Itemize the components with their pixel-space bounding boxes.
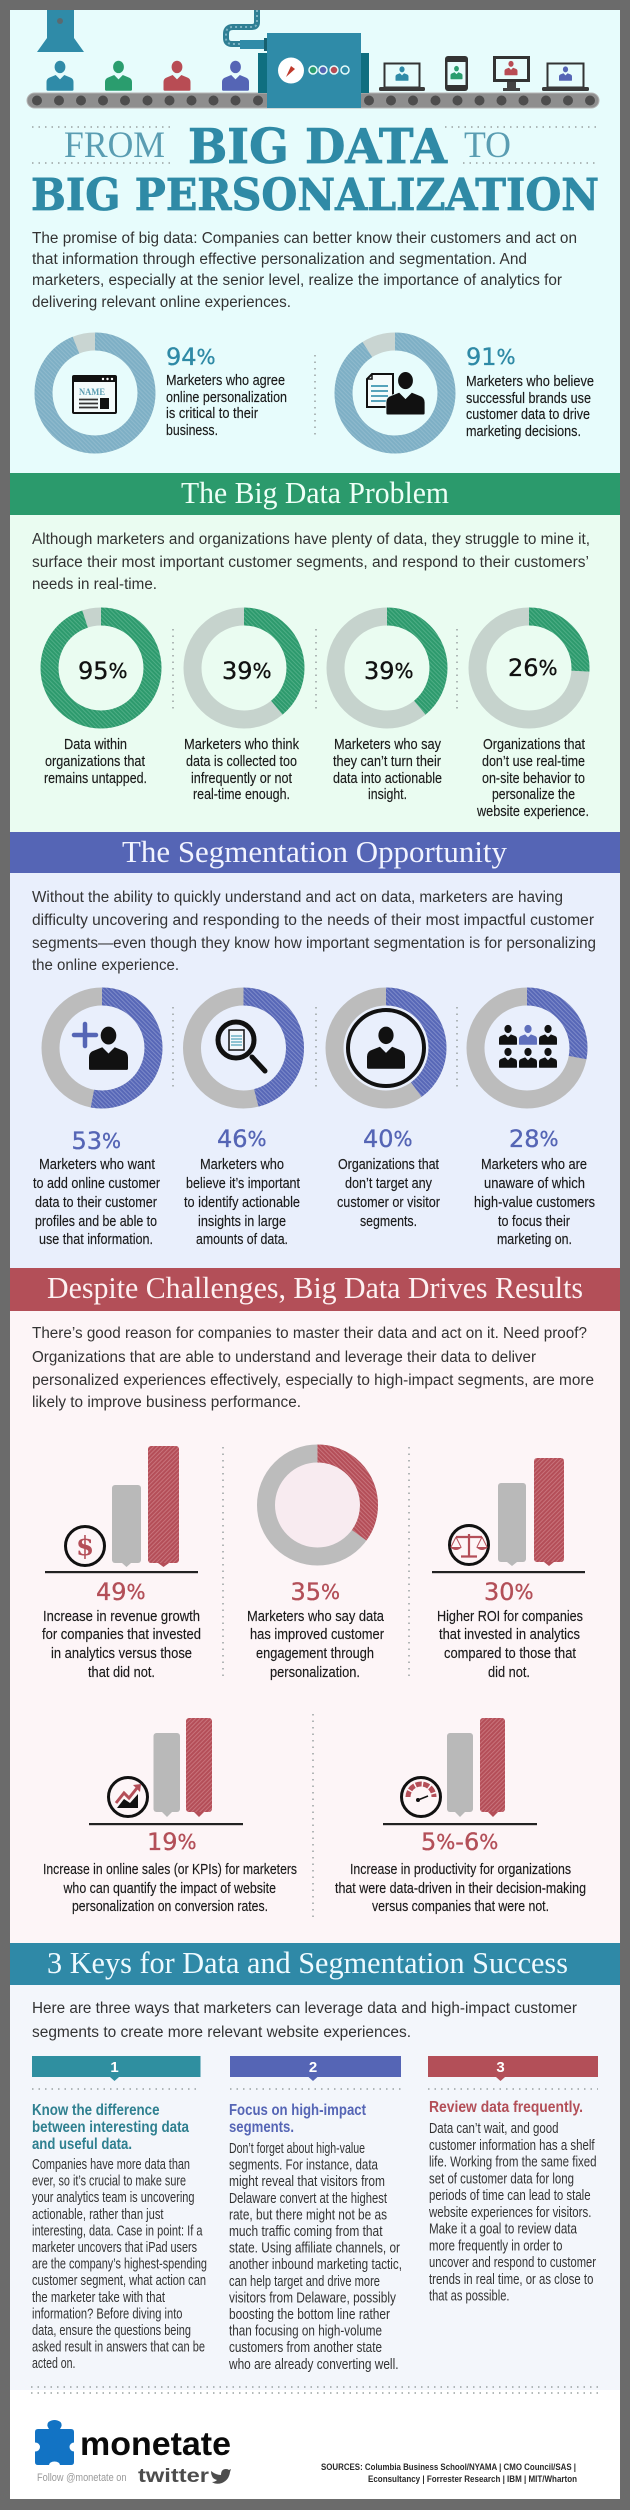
key 1 xyxy=(32,2056,207,2372)
captions: segmentation stats: high-value customers xyxy=(474,1194,595,1211)
donut: 39%: 39 xyxy=(222,657,253,685)
icon: name window: NAME xyxy=(79,387,105,397)
text: results intro: personalized experiences effectively, especially to high-impact segments, are more xyxy=(32,1372,594,1389)
stats: results percentages top row: 49 xyxy=(96,1578,127,1606)
captions: segmentation stats: to add online customer xyxy=(33,1175,160,1192)
icon: trend arrow xyxy=(108,1778,148,1816)
text: keys intro: Here are three ways that marketers can leverage data and high-impact customer xyxy=(32,2000,577,2017)
stats: results percentages bottom row xyxy=(147,1828,498,1856)
captions: results bottom row: personalization on conversion rates. xyxy=(72,1898,268,1915)
sources: Econsultancy | Forrester Research | IBM | MIT/Wharton xyxy=(368,2474,577,2485)
donut: 28% xyxy=(476,996,578,1100)
captions: results bottom row: who can quantify the impact of website xyxy=(63,1880,276,1897)
text: results intro xyxy=(32,1325,594,1411)
stat: 94%: business. xyxy=(166,422,218,439)
captions: segmentation stats: Marketers who are xyxy=(481,1156,587,1173)
icon: audience group xyxy=(499,1025,557,1068)
intro text: that information through effective personalization and segmentation. And xyxy=(32,251,527,268)
sources xyxy=(321,2462,577,2485)
title: BIG DATA xyxy=(188,119,448,175)
body: key 3: Data can’t wait, and good xyxy=(429,2121,558,2137)
body: key 1: the marketer take with that xyxy=(32,2290,165,2306)
captions: segmentation stats: don’t target any xyxy=(345,1175,432,1192)
icon: phone green xyxy=(445,56,468,91)
icon: laptop blue xyxy=(542,64,589,91)
intro text xyxy=(32,230,577,311)
panel: the big data problem xyxy=(10,473,620,832)
text: problem intro: needs in real-time. xyxy=(32,576,157,593)
body: key 1: acted on. xyxy=(32,2356,76,2372)
text: keys intro: segments to create more relevant website experiences. xyxy=(32,2024,411,2041)
body: key 3 xyxy=(428,2121,597,2304)
heading: key 2: Focus on high-impact xyxy=(229,2102,367,2119)
stat: 91%: customer data to drive xyxy=(466,406,590,423)
heading: key 1: between interesting data xyxy=(32,2119,189,2136)
text: segmentation intro: difficulty uncovering and responding to the needs of their most impactful customer xyxy=(32,912,594,929)
captions: problem stats: website experience. xyxy=(476,803,589,820)
icon: dollar: $ xyxy=(76,1532,94,1562)
captions: problem stats: data into actionable xyxy=(333,770,442,787)
heading: key 1: and useful data. xyxy=(32,2136,132,2153)
illustration: conveyor machine xyxy=(27,10,599,108)
captions: results top row: in analytics versus those xyxy=(51,1645,192,1662)
body: key 2: than focusing on high-volume xyxy=(229,2324,382,2340)
donut: 26%: 26 xyxy=(508,654,539,682)
captions: problem stats: remains untapped. xyxy=(44,770,147,787)
conveyor belt xyxy=(27,93,599,108)
stats: results percentages top row: 35 xyxy=(290,1578,321,1606)
stat: 94%: % xyxy=(197,345,216,369)
captions: results top row: compared to those that xyxy=(444,1645,577,1662)
bar chart: 5%-6% productivity xyxy=(383,1718,537,1825)
captions: results top row: that did not. xyxy=(88,1664,155,1681)
donut: 39% xyxy=(192,616,296,720)
heading: key 1 xyxy=(32,2102,189,2153)
captions: results top row: that invested in analytics xyxy=(439,1626,580,1643)
banner: number 1 xyxy=(32,2056,200,2081)
sources: SOURCES: Columbia Business School/NYAMA | CMO Council/SAS | xyxy=(321,2462,576,2473)
follow on twitter: Follow @monetate on xyxy=(37,2472,126,2484)
text: segmentation intro: segments—even though they know how important segmentation is for personalizing xyxy=(32,935,596,952)
captions: problem stats: real-time enough. xyxy=(193,786,290,803)
stats: segmentation percentages: 40 xyxy=(363,1125,394,1153)
donut: 35% xyxy=(266,1454,369,1556)
stats: segmentation percentages: % xyxy=(102,1129,121,1153)
banner: number 1: 1 xyxy=(110,2059,119,2076)
text: results intro: Organizations that are able to understand and leverage their data to deliver xyxy=(32,1349,536,1366)
captions: results bottom row: Increase in online sales (or KPIs) for marketers xyxy=(43,1861,297,1878)
text: segmentation intro: the online experience. xyxy=(32,957,179,974)
stat: 94%: Marketers who agree xyxy=(166,372,285,389)
machine xyxy=(226,10,369,108)
heading: the segmentation opportunity: The Segmentation Opportunity xyxy=(122,834,507,869)
captions: results top row: personalization. xyxy=(270,1664,360,1681)
body: key 2: boosting the bottom line rather xyxy=(229,2307,390,2323)
captions: problem stats xyxy=(44,736,589,820)
captions: results bottom row xyxy=(43,1861,586,1915)
stats: results percentages bottom row: % xyxy=(178,1830,197,1854)
icon: laptop teal xyxy=(379,64,425,91)
stats: results percentages bottom row: 5 xyxy=(421,1828,436,1856)
banner: number 3 xyxy=(428,2056,598,2081)
intro text: delivering relevant online experiences. xyxy=(32,294,291,311)
captions: problem stats: don’t use real-time xyxy=(482,753,585,770)
body: key 1: ever, so it’s crucial to make sure xyxy=(32,2174,186,2190)
donut: 53% xyxy=(50,996,154,1100)
captions: results bottom row: Increase in productivity for organizations xyxy=(350,1861,571,1878)
icon: puzzle piece xyxy=(31,2420,78,2468)
captions: results top row: for companies that invested xyxy=(42,1626,201,1643)
stat: 91%: successful brands use xyxy=(466,390,591,407)
text: results intro: likely to improve business performance. xyxy=(32,1394,301,1411)
icon: balance scale xyxy=(450,1526,488,1564)
captions: segmentation stats: profiles and be able to xyxy=(35,1213,157,1230)
captions: results bottom row: that were data-driven in their decision-making xyxy=(335,1880,586,1897)
captions: segmentation stats: unaware of which xyxy=(484,1175,585,1192)
captions: segmentation stats: Marketers who want xyxy=(39,1156,156,1173)
captions: results top row: has improved customer xyxy=(250,1626,384,1643)
body: key 2: segments. For instance, data xyxy=(229,2158,379,2174)
stats: segmentation percentages: % xyxy=(394,1127,413,1151)
captions: segmentation stats: Organizations that xyxy=(338,1156,440,1173)
text: keys intro xyxy=(32,2000,577,2041)
body: key 1: Companies have more data than xyxy=(32,2157,190,2173)
banner: number 3: 3 xyxy=(496,2059,505,2076)
captions: problem stats: Marketers who say xyxy=(334,736,441,753)
stat: 91%: Marketers who believe xyxy=(466,373,594,390)
key 3 xyxy=(428,2056,598,2304)
icon: data funnel xyxy=(37,10,84,52)
stat: 91%: marketing decisions. xyxy=(466,423,581,440)
stats: segmentation percentages: 53 xyxy=(72,1127,102,1155)
captions: results top row: Marketers who say data xyxy=(247,1608,385,1625)
icon: magnifier on document xyxy=(218,1022,265,1071)
captions: problem stats: data is collected too xyxy=(186,753,297,770)
stats: segmentation percentages: % xyxy=(540,1127,559,1151)
donut: 95%: % xyxy=(109,659,128,683)
captions: problem stats: they can’t turn their xyxy=(333,753,441,770)
body: key 3: Make it a goal to review data xyxy=(429,2222,578,2238)
panel: big data drives results xyxy=(10,1268,620,1943)
body: key 2: might reveal that visitors from xyxy=(229,2174,385,2190)
heading: key 2: segments. xyxy=(229,2119,294,2136)
panel: footer xyxy=(10,2387,620,2499)
stats: results percentages bottom row: % xyxy=(479,1830,498,1854)
donut: 26%: % xyxy=(539,656,558,680)
captions: results top row: did not. xyxy=(488,1664,530,1681)
captions: results top row: engagement through xyxy=(256,1645,374,1662)
stats: results percentages top row xyxy=(96,1578,534,1606)
body: key 2: rate, but there might not be as xyxy=(229,2207,387,2223)
donut: 40% xyxy=(334,996,438,1100)
body: key 1: marketer uncovers that iPad users xyxy=(32,2240,197,2256)
captions: problem stats: infrequently or not xyxy=(191,770,293,787)
body: key 1: your analytics team is uncovering xyxy=(32,2190,194,2206)
captions: problem stats: Organizations that xyxy=(483,736,586,753)
captions: segmentation stats: amounts of data. xyxy=(196,1231,288,1248)
follow on twitter: twitter xyxy=(138,2466,210,2487)
donut: 26% xyxy=(478,616,580,720)
donut: 39% second: % xyxy=(395,659,414,683)
stat: 94%: is critical to their xyxy=(166,405,258,422)
captions: segmentation stats: marketing on. xyxy=(497,1231,572,1248)
donut: 95% xyxy=(50,616,152,720)
body: key 1: information? Before diving into xyxy=(32,2306,182,2322)
panel: the segmentation opportunity xyxy=(10,832,620,1268)
captions: problem stats: Data within xyxy=(64,736,127,753)
captions: problem stats: Marketers who think xyxy=(184,736,299,753)
title: BIG PERSONALIZATION xyxy=(31,170,599,221)
body: key 2: Don’t forget about high-value xyxy=(229,2141,365,2157)
stats: segmentation percentages: % xyxy=(248,1127,267,1151)
body: key 2: much traffic coming from that xyxy=(229,2224,382,2240)
stats: segmentation percentages xyxy=(72,1125,559,1155)
heading: key 2 xyxy=(229,2102,367,2136)
captions: segmentation stats xyxy=(33,1156,595,1248)
body: key 1 xyxy=(32,2157,207,2372)
bar chart: 19% online sales xyxy=(89,1718,243,1825)
captions: problem stats: organizations that xyxy=(45,753,146,770)
icons: people on belt xyxy=(46,61,249,91)
stats: results percentages top row: % xyxy=(515,1580,534,1604)
captions: results bottom row: versus companies that were not. xyxy=(372,1898,549,1915)
panel: 3 keys for success xyxy=(10,1943,620,2390)
stats: results percentages top row: % xyxy=(321,1580,340,1604)
icon: add person xyxy=(74,1024,128,1070)
icon: dollar xyxy=(66,1526,104,1566)
icon: monitor red xyxy=(493,56,530,91)
body: key 2 xyxy=(228,2141,402,2373)
donut: 95%: 95 xyxy=(78,657,109,685)
body: key 1: interesting, data. Case in point: If a xyxy=(32,2223,203,2239)
donut: 46% xyxy=(192,996,295,1100)
title: FROM xyxy=(64,125,165,166)
heading: 3 keys: 3 Keys for Data and Segmentation Success xyxy=(47,1945,568,1980)
body: key 3: website experiences for visitors. xyxy=(428,2205,591,2221)
body: key 2: Delaware convert at the highest xyxy=(229,2191,387,2207)
stat: 94%: online personalization xyxy=(166,389,287,406)
body: key 2: another inbound marketing tactic, xyxy=(229,2257,402,2273)
text: results intro: There’s good reason for companies to master their data and act on it. Need proof? xyxy=(32,1325,587,1342)
captions: segmentation stats: data to their customer xyxy=(35,1194,157,1211)
logo: monetate xyxy=(31,2420,231,2468)
text: problem intro: Although marketers and organizations have plenty of data, they struggle to mine it, xyxy=(32,531,590,548)
captions: segmentation stats: insights in large xyxy=(198,1213,286,1230)
stats: results percentages bottom row: 19 xyxy=(147,1828,178,1856)
captions: segmentation stats: believe it’s important xyxy=(186,1175,301,1192)
body: key 1: customer segment, what action can xyxy=(32,2273,206,2289)
heading: the big data problem xyxy=(10,473,620,515)
stat: 91%: % xyxy=(497,345,516,369)
body: key 1: actionable, rather than just xyxy=(32,2207,164,2223)
body: key 2: state. Using affiliate channels, or xyxy=(229,2241,400,2257)
donut: 94% xyxy=(44,342,146,444)
bar chart: 30% roi xyxy=(432,1458,585,1573)
icon: bird xyxy=(211,2469,231,2484)
body: key 3: that as possible. xyxy=(429,2288,510,2304)
captions: results top row xyxy=(42,1608,583,1681)
body: key 3: more frequently in order to xyxy=(429,2238,562,2254)
donut: 39%: % xyxy=(253,659,272,683)
captions: problem stats: on-site behavior to xyxy=(482,770,585,787)
heading: key 3: Review data frequently. xyxy=(429,2099,583,2116)
body: key 2: can help target and drive more xyxy=(229,2274,380,2290)
icon: speedometer xyxy=(402,1778,440,1816)
icon: target person xyxy=(348,1010,424,1086)
stat: 94%: 94 xyxy=(166,343,197,371)
key 2 xyxy=(228,2056,402,2373)
body: key 2: visitors from Delaware, possibly xyxy=(229,2290,397,2306)
body: key 3: set of customer data for long xyxy=(429,2171,574,2187)
captions: segmentation stats: use that information. xyxy=(39,1231,153,1248)
icon: document and person xyxy=(367,372,425,415)
donut: 91% xyxy=(344,342,446,444)
stats: results percentages top row: 30 xyxy=(484,1578,515,1606)
heading: the big data problem: The Big Data Problem xyxy=(181,475,449,510)
captions: segmentation stats: Marketers who xyxy=(200,1156,284,1173)
text: problem intro: surface their most important customer segments, and respond to their customers’ xyxy=(32,554,589,571)
intro text: The promise of big data: Companies can better know their customers and act on xyxy=(32,230,577,247)
body: key 1: are the company’s highest-spending xyxy=(32,2257,207,2273)
title xyxy=(31,119,599,221)
heading: key 1: Know the difference xyxy=(32,2102,160,2119)
stat: 91%: 91 xyxy=(466,343,497,371)
body: key 1: asked result in answers that can be xyxy=(32,2340,205,2356)
captions: problem stats: insight. xyxy=(368,786,407,803)
stats: results percentages bottom row: -6 xyxy=(455,1828,479,1856)
body: key 2: customers from another state xyxy=(229,2340,382,2356)
panel: hero xyxy=(10,10,620,473)
body: key 2: who are already converting well. xyxy=(228,2357,398,2373)
captions: segmentation stats: customer or visitor xyxy=(337,1194,440,1211)
stats: results percentages bottom row: % xyxy=(436,1830,455,1854)
logo: monetate: monetate xyxy=(80,2425,231,2462)
banner: number 2: 2 xyxy=(309,2059,317,2076)
text: problem intro xyxy=(32,531,590,593)
heading: despite challenges: Despite Challenges, Big Data Drives Results xyxy=(47,1270,583,1305)
bar chart: 49% revenue growth xyxy=(45,1446,198,1573)
captions: segmentation stats: to identify actionable xyxy=(184,1194,300,1211)
captions: segmentation stats: to focus their xyxy=(498,1213,570,1230)
body: key 3: periods of time can lead to stale xyxy=(429,2188,591,2204)
donut: 39% second: 39 xyxy=(364,657,395,685)
stats: results percentages top row: % xyxy=(127,1580,146,1604)
text: segmentation intro xyxy=(32,889,596,974)
text: segmentation intro: Without the ability to quickly understand and act on data, marketers are having xyxy=(32,889,563,906)
stats: segmentation percentages: 46 xyxy=(217,1125,248,1153)
follow on twitter xyxy=(37,2466,231,2487)
donut: 39% second xyxy=(336,616,438,720)
heading: the segmentation opportunity xyxy=(10,832,620,873)
captions: segmentation stats: segments. xyxy=(360,1213,417,1230)
banner: number 2 xyxy=(230,2056,401,2081)
stat: 94% xyxy=(166,343,287,439)
stat: 91% xyxy=(466,343,594,440)
captions: results top row: Increase in revenue growth xyxy=(43,1608,200,1625)
intro text: marketers, especially at the senior level, realize the importance of analytics for xyxy=(32,272,562,289)
title: TO xyxy=(464,125,511,166)
captions: problem stats: personalize the xyxy=(492,786,575,803)
captions: results top row: Higher ROI for companies xyxy=(437,1608,583,1625)
body: key 1: data, ensure the questions being xyxy=(32,2323,191,2339)
stats: segmentation percentages: 28 xyxy=(509,1125,540,1153)
